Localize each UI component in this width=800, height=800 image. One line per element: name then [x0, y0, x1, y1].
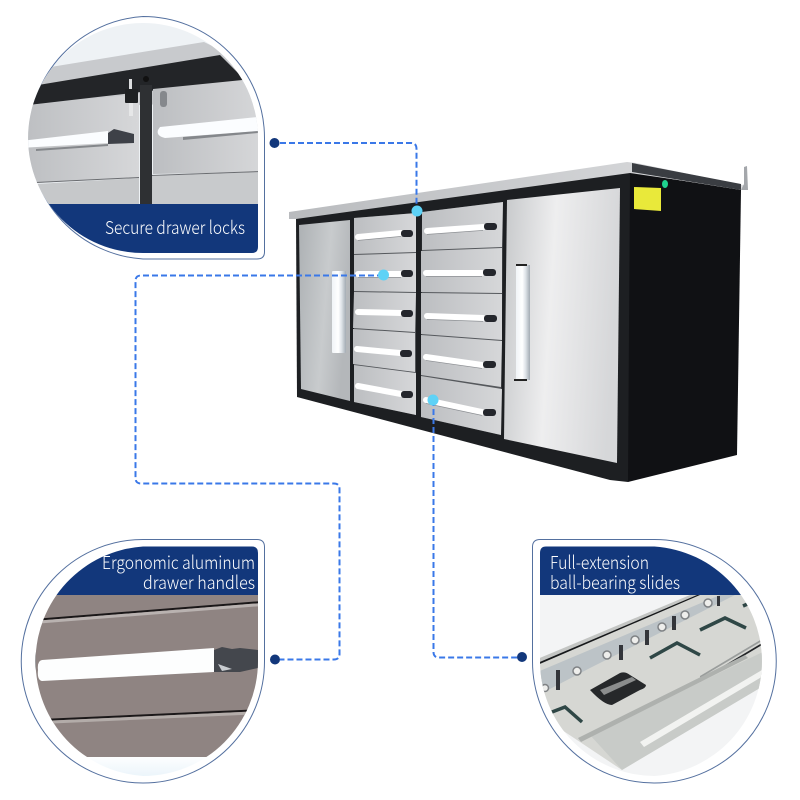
slots [552, 602, 752, 722]
retainer cutouts [556, 596, 720, 690]
right door [504, 188, 620, 463]
left drawer column [353, 213, 416, 415]
cabinet front frame [296, 172, 630, 482]
marker: slides [428, 394, 438, 406]
caption line 2: drawer handles [143, 569, 255, 595]
caption: Secure drawer locks [105, 214, 245, 240]
caption line 1: Ergonomic aluminum [102, 549, 255, 575]
caption line 1: Full-extension [550, 549, 649, 575]
left door [299, 220, 350, 401]
marker: locks [412, 206, 422, 216]
caption bar [56, 546, 258, 595]
left door handle [332, 271, 346, 353]
panel outline [532, 540, 776, 783]
handle close-up photo [36, 595, 258, 776]
caption bar [49, 204, 258, 253]
lock close-up photo [28, 23, 258, 216]
cabinet side panel [628, 172, 741, 482]
marker: handles [378, 270, 389, 280]
panel: ergonomic aluminum drawer handles [20, 540, 265, 783]
drawer knobs [400, 223, 497, 416]
drawer handles [357, 227, 483, 412]
anchor dot: locks [270, 138, 280, 148]
ball bearings [542, 599, 712, 692]
anchor dot: slides [517, 652, 527, 662]
caption bar [540, 546, 741, 595]
connector: handles [136, 276, 383, 660]
anchor dot: handles [270, 654, 280, 664]
panel: secure drawer locks [20, 16, 265, 260]
panel outline [21, 540, 265, 783]
panel outline [29, 16, 264, 259]
drawer gap backing [354, 213, 416, 415]
square window [590, 672, 646, 705]
warning label [634, 187, 661, 211]
drawer handle shadows [358, 230, 483, 415]
right drawer column [421, 202, 503, 435]
countertop [289, 162, 747, 219]
connector: locks [280, 143, 416, 211]
right door handle [514, 264, 530, 381]
cabinet [289, 162, 748, 482]
green sticker [662, 180, 668, 188]
caption line 2: ball-bearing slides [550, 569, 680, 595]
connector: slides [434, 400, 518, 658]
panel: full-extension ball-bearing slides [530, 540, 780, 785]
slide rail close-up photo [540, 595, 762, 776]
